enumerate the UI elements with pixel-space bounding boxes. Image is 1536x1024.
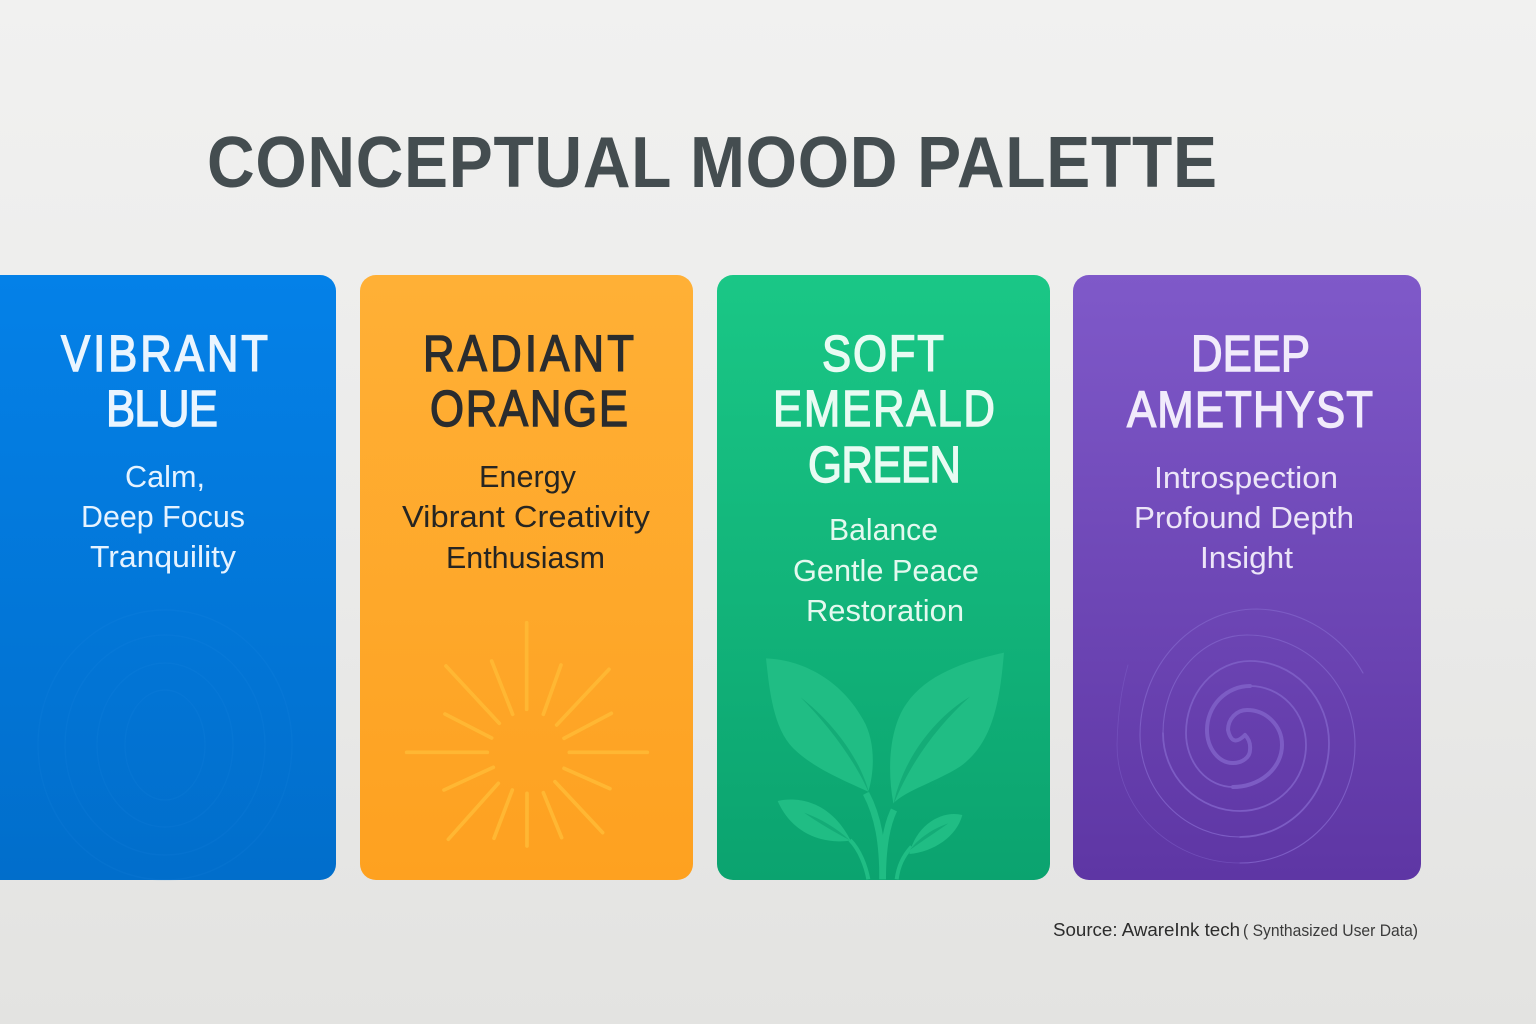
source note: ( Synthasized User Data) <box>1243 921 1418 940</box>
mood words: purple: Introspection <box>1154 460 1338 495</box>
heading: deep amethyst: DEEP <box>1191 326 1310 383</box>
mood words: green: Restoration <box>806 593 964 628</box>
icon: spiral <box>1117 609 1363 863</box>
mood words: orange: Vibrant Creativity <box>402 499 651 534</box>
heading: soft emerald green: SOFT <box>822 326 944 383</box>
heading: vibrant blue: VIBRANT <box>61 326 268 383</box>
mood words: blue: Calm, <box>125 459 205 494</box>
mood words: green: Gentle Peace <box>793 553 979 588</box>
heading: vibrant blue <box>61 326 268 438</box>
heading: deep amethyst: AMETHYST <box>1127 382 1373 439</box>
title: CONCEPTUAL MOOD PALETTE <box>207 122 1217 203</box>
heading: deep amethyst <box>1127 326 1373 439</box>
icon: faint ripples <box>38 610 292 880</box>
card background: green <box>717 275 1050 880</box>
heading: vibrant blue: BLUE <box>106 381 218 438</box>
heading: soft emerald green: EMERALD <box>773 381 995 438</box>
card background: blue <box>0 275 336 880</box>
heading: radiant orange: ORANGE <box>430 381 628 438</box>
mood words: blue <box>81 459 245 574</box>
mood words: blue: Deep Focus <box>81 499 245 534</box>
mood words: blue: Tranquility <box>90 539 237 574</box>
heading: soft emerald green: GREEN <box>808 437 961 494</box>
mood words: orange: Energy <box>479 459 576 494</box>
panel: radiant orange <box>360 275 693 880</box>
mood words: green: Balance <box>829 512 938 547</box>
source note: Source: AwareInk tech <box>1053 920 1240 940</box>
mood words: green <box>793 512 979 628</box>
icon: sunburst <box>407 623 647 846</box>
mood words: purple: Profound Depth <box>1134 500 1354 535</box>
mood words: purple: Insight <box>1200 540 1293 575</box>
panel: deep amethyst <box>1073 275 1421 880</box>
panel: soft emerald green <box>717 275 1050 880</box>
heading: radiant orange: RADIANT <box>423 326 634 383</box>
source note <box>1053 920 1418 940</box>
mood words: orange: Enthusiasm <box>446 540 605 575</box>
icon: leaves <box>766 653 1004 879</box>
card background: orange <box>360 275 693 880</box>
heading: soft emerald green <box>773 326 995 494</box>
heading: radiant orange <box>423 326 634 438</box>
mood words: purple <box>1134 460 1354 575</box>
card background: purple <box>1073 275 1421 880</box>
mood words: orange <box>402 459 651 575</box>
panel: vibrant blue <box>0 275 336 880</box>
